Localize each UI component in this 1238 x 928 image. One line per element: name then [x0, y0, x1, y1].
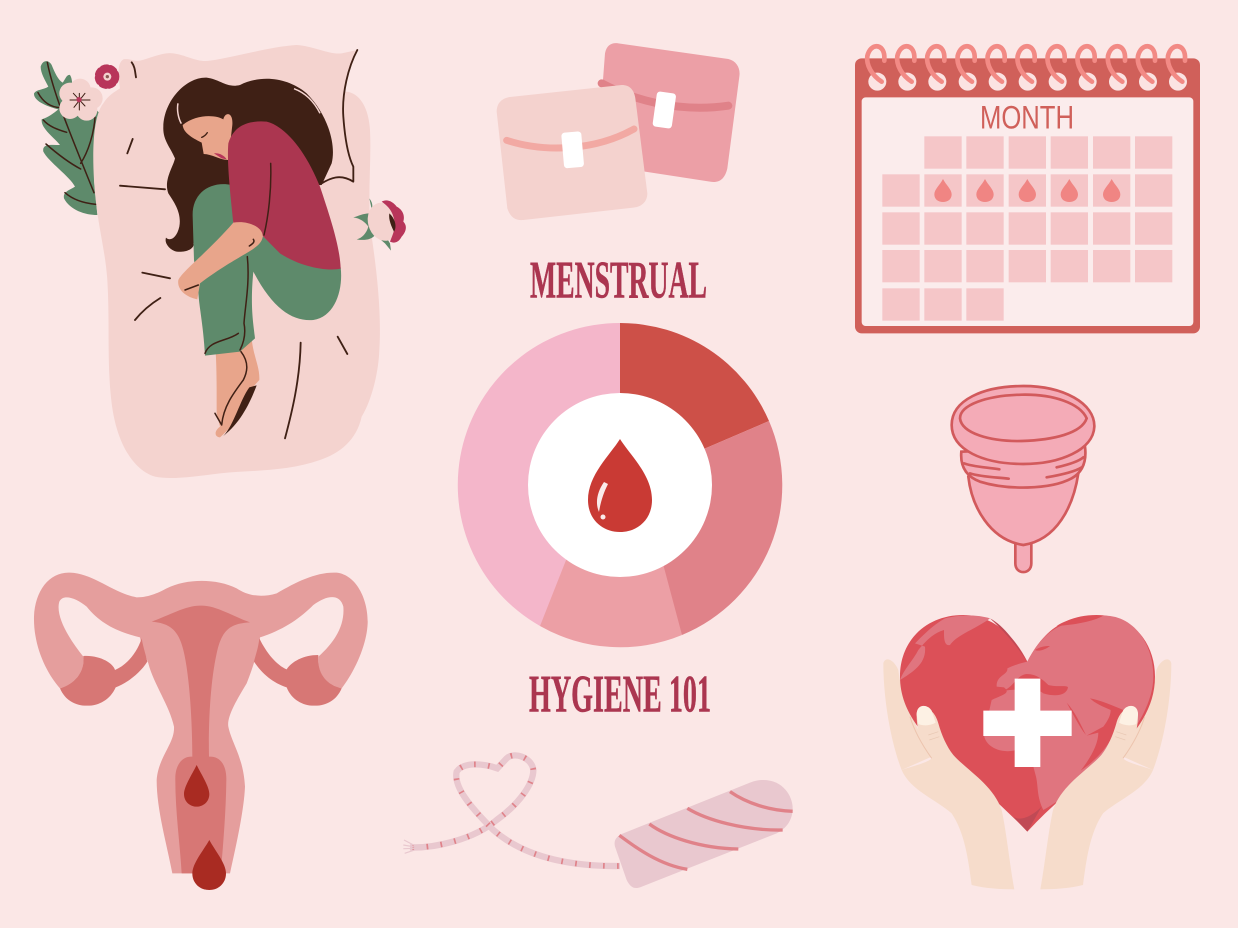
calendar body [855, 58, 1200, 333]
pale flower [59, 79, 103, 121]
back pad [597, 43, 740, 182]
right ovary [254, 638, 342, 706]
maroon top [228, 121, 341, 270]
period day drops [934, 179, 1120, 202]
legs and feet [215, 337, 259, 437]
icon: blood drop [588, 439, 652, 532]
woman's hair [163, 78, 333, 252]
inland seas [1003, 616, 1123, 771]
small blood drop [184, 765, 209, 807]
hair highlights [178, 89, 320, 124]
illustration: menstrual cup [952, 386, 1094, 572]
tampon stripes [619, 792, 793, 869]
cup opening [960, 395, 1087, 441]
segment: pale pink [458, 323, 620, 626]
green trousers [193, 184, 341, 356]
date grid [882, 136, 1172, 321]
illustration: sanitary pads [497, 43, 740, 220]
bed creases [120, 50, 357, 438]
title: MENSTRUAL: MENSTRUAL [530, 252, 707, 310]
heading: MONTH: MONTH [980, 99, 1074, 135]
front pad [497, 85, 647, 220]
illustration: woman curled up on bed [34, 45, 406, 478]
illustration: uterus [34, 573, 368, 890]
illustration: tampon [403, 755, 793, 888]
uterine cavity [152, 606, 250, 873]
segment: rose [620, 421, 782, 635]
bed and pillow [93, 45, 380, 478]
figure line work [185, 163, 271, 425]
heart shading [990, 618, 1042, 832]
cup body [968, 447, 1078, 545]
calendar page [862, 97, 1193, 326]
hand backs [883, 659, 1171, 770]
centre hole [528, 393, 712, 577]
continents east [984, 616, 1153, 810]
binding holes [868, 73, 1187, 91]
illustration: calendar [855, 46, 1200, 333]
bud flower [353, 198, 406, 251]
red flower [98, 68, 116, 85]
uterus outer shape [34, 573, 368, 873]
spiral rings [867, 46, 1185, 82]
segment: red [620, 323, 769, 485]
heart globe [900, 615, 1155, 832]
tampon string [403, 755, 620, 866]
continents north west [900, 615, 990, 680]
tampon body [615, 780, 793, 888]
illustration: hands holding heart globe [883, 615, 1171, 889]
cup rim [952, 386, 1094, 464]
large blood drop [192, 840, 226, 890]
left ovary [60, 638, 147, 706]
segment: light rose [540, 545, 682, 647]
title: HYGIENE 101: HYGIENE 101 [529, 666, 711, 724]
right hand [1040, 706, 1153, 889]
leaf [34, 61, 100, 215]
arm [178, 222, 263, 299]
cup stem [1015, 543, 1031, 572]
woman's face [183, 114, 232, 160]
left hand [902, 706, 1014, 889]
donut chart with blood drop [458, 323, 782, 647]
cup ridges [961, 447, 1085, 488]
white medical cross [983, 679, 1072, 767]
